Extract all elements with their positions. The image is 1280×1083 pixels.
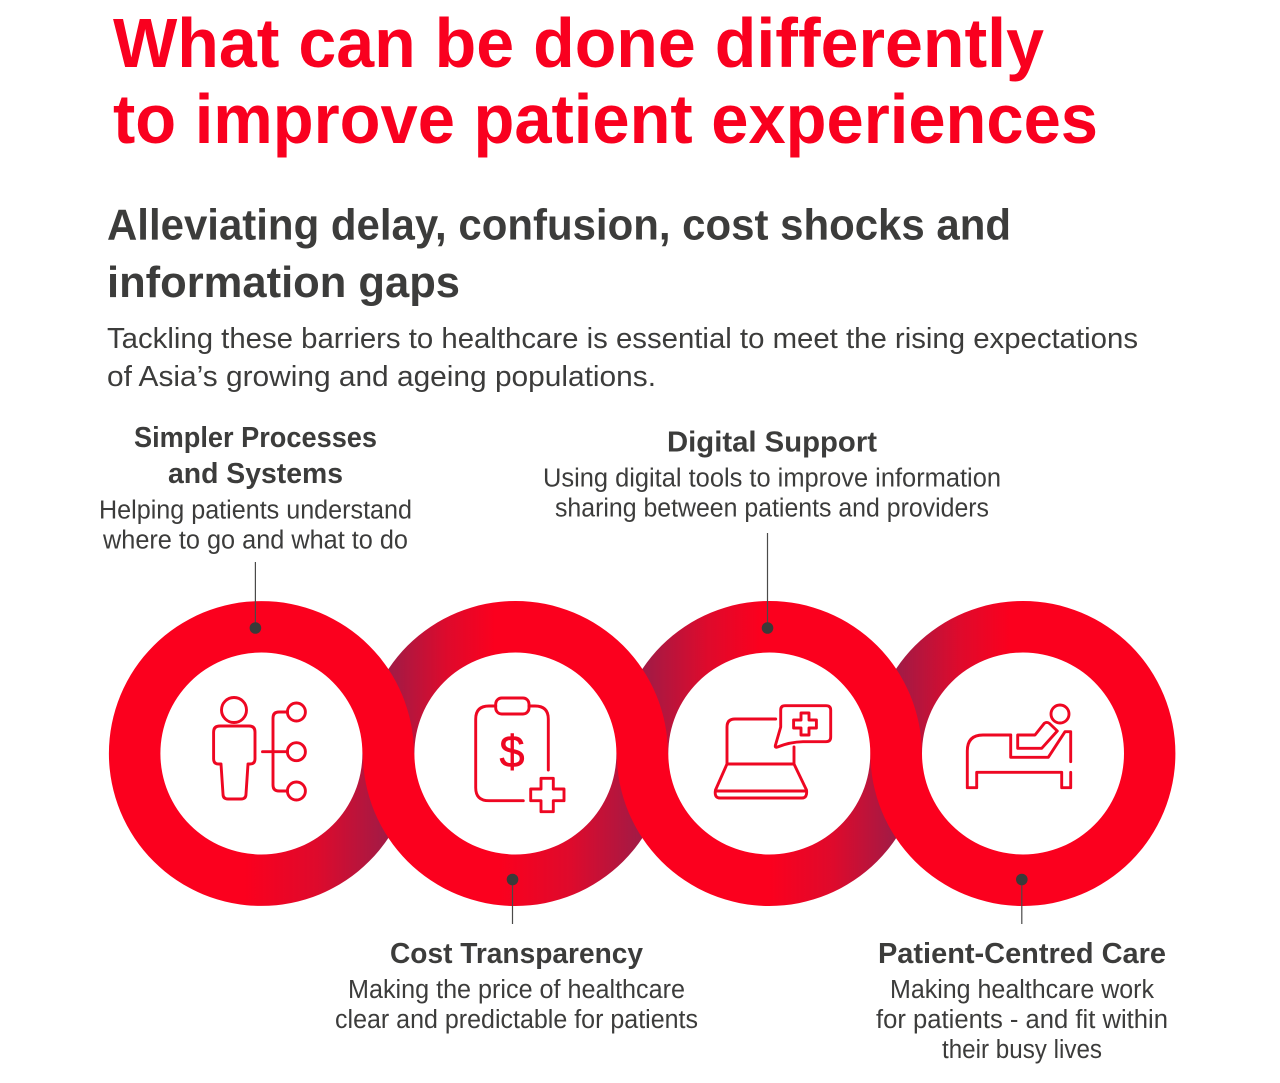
title: to improve patient experiences — [113, 80, 1098, 158]
label: digital support: Digital Support — [667, 426, 877, 458]
subtitle heading: Alleviating delay, confusion, cost shocks and — [107, 200, 1011, 250]
label: simpler processes — [99, 422, 412, 554]
label: simpler processes: where to go and what to do — [102, 526, 408, 554]
label: cost transparency: clear and predictable for patients — [335, 1006, 698, 1034]
label: simpler processes: Helping patients understand — [99, 496, 412, 524]
label: cost transparency: Cost Transparency — [390, 938, 643, 970]
label: patient-centred care: their busy lives — [942, 1036, 1102, 1064]
intro text — [107, 323, 1138, 393]
intro text: of Asia’s growing and ageing populations. — [107, 361, 656, 393]
label: cost transparency: Making the price of healthcare — [348, 976, 685, 1004]
icon: laptop with medical speech bubble — [715, 706, 831, 798]
label: patient-centred care: Making healthcare work — [890, 976, 1154, 1004]
label: digital support: sharing between patients and providers — [555, 494, 989, 522]
interlinked rings — [109, 601, 1175, 906]
label: simpler processes: and Systems — [168, 458, 343, 490]
connector: cost transparency — [507, 874, 518, 924]
label: patient-centred care: Patient-Centred Care — [878, 938, 1166, 970]
icon: clipboard with dollar sign and medical cross: $ — [499, 726, 525, 777]
connector: patient-centred care — [1016, 874, 1028, 924]
subtitle heading: information gaps — [107, 258, 460, 307]
intro text: Tackling these barriers to healthcare is essential to meet the rising expectations — [107, 323, 1138, 355]
label: patient-centred care — [876, 938, 1168, 1064]
icon: patient resting in bed — [967, 705, 1071, 788]
title — [113, 4, 1098, 158]
label: cost transparency — [335, 938, 698, 1034]
label: digital support: Using digital tools to improve information — [543, 464, 1001, 492]
title: What can be done differently — [113, 4, 1044, 82]
icon: person with process branches — [214, 698, 305, 800]
icon: clipboard with dollar sign and medical cross — [476, 698, 564, 812]
connector: digital support — [762, 533, 773, 634]
subtitle heading — [107, 200, 1011, 307]
label: patient-centred care: for patients - and fit within — [876, 1006, 1168, 1034]
label: digital support — [543, 426, 1001, 522]
label: simpler processes: Simpler Processes — [134, 422, 377, 454]
connector: simpler processes — [250, 562, 261, 634]
